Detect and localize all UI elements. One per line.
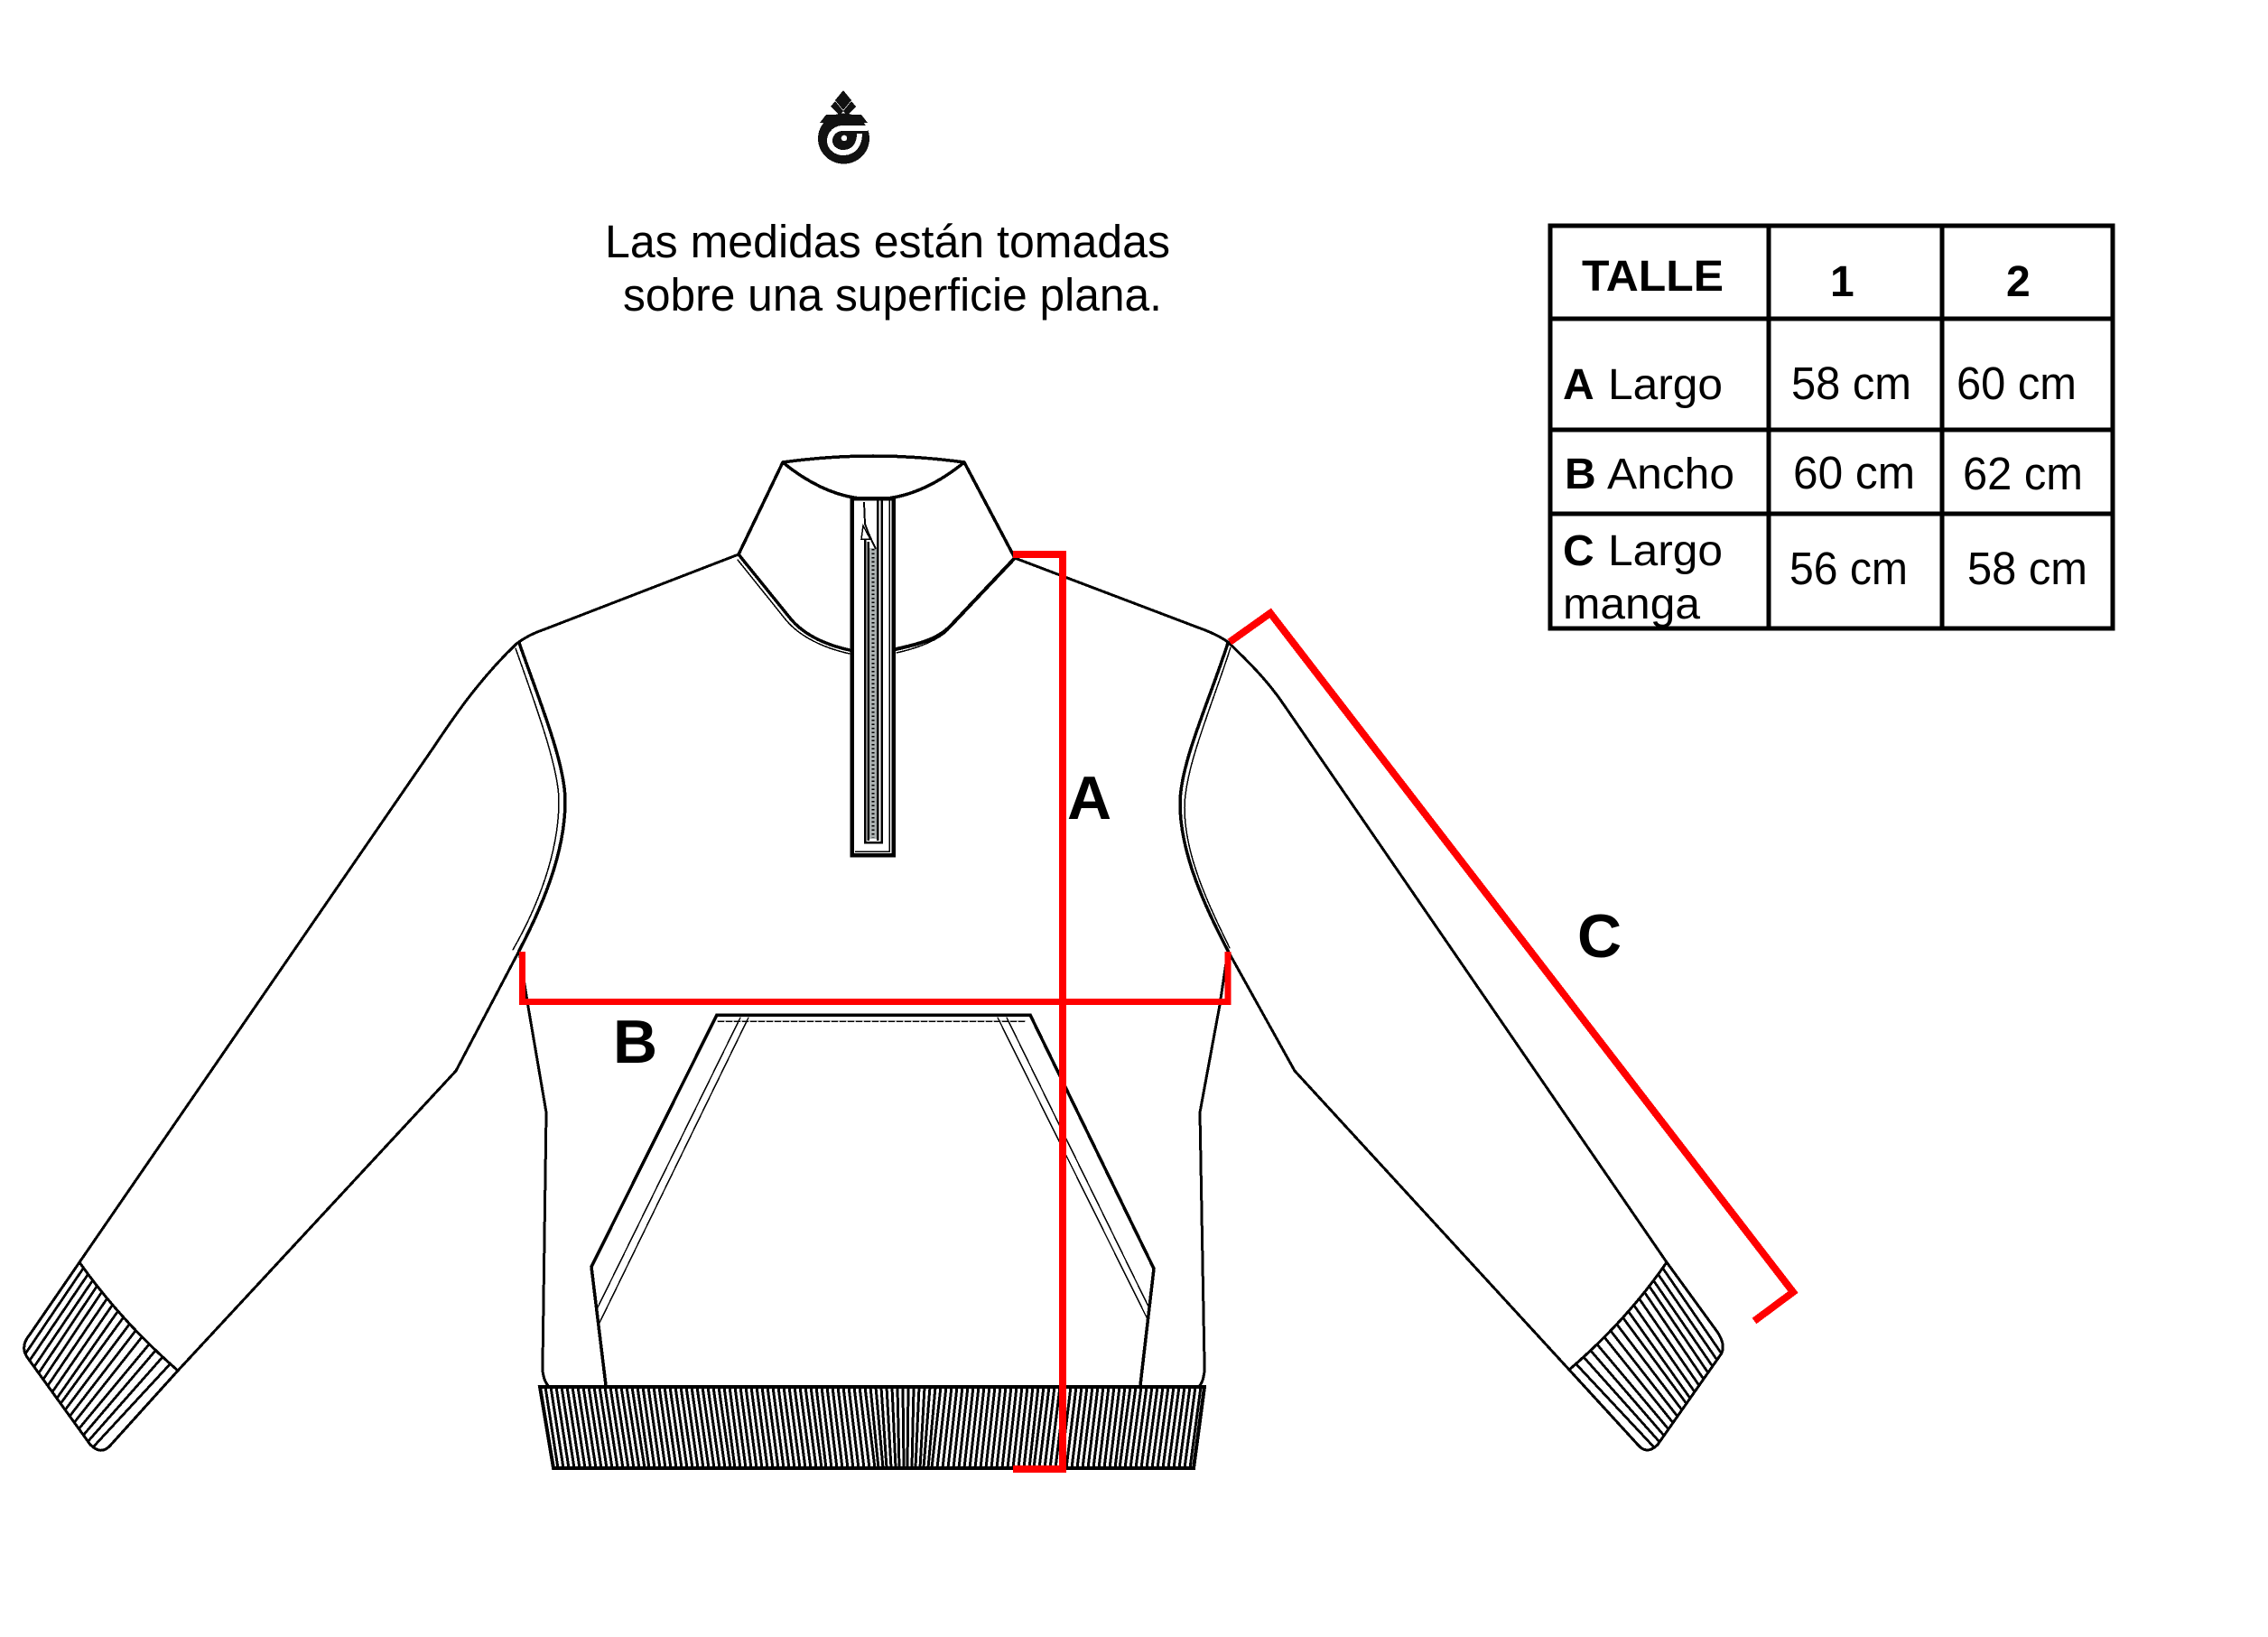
table header row [1582,253,2031,306]
row A Largo: Largo [1608,361,1723,409]
table grid [1550,226,2113,628]
collar [739,456,1015,558]
bottom ribbed hem [540,1387,1204,1468]
row C Largo manga: manga [1563,581,1700,628]
label C: C [1577,902,1622,971]
text block: measurement note [605,216,1170,321]
row C Largo manga: C [1563,527,1594,575]
table header row: TALLE [1582,253,1724,301]
row B Ancho: B [1565,451,1596,498]
row A Largo: 58 cm [1791,358,1911,409]
row C Largo manga: 58 cm [1967,543,2087,594]
table header row: 2 [2006,258,2031,306]
row C Largo manga: Largo [1608,527,1723,575]
right sleeve [1228,642,1667,1370]
row C Largo manga [1563,527,2087,628]
text block: measurement note: Las medidas están tomadas [605,216,1170,267]
garment: half-zip sweatshirt flat drawing [24,456,1723,1468]
body sides [519,951,1228,1387]
size table [1550,226,2113,628]
row B Ancho: 60 cm [1793,447,1915,498]
kangaroo pocket [591,1015,1154,1385]
measurement line A: body length [1013,554,1063,1469]
row A Largo: A [1563,361,1594,409]
measurement line B: chest width [522,952,1228,1002]
right cuff [1569,1262,1723,1450]
measurement line C: sleeve length [1230,613,1793,1321]
row A Largo: 60 cm [1957,358,2077,409]
row B Ancho: 62 cm [1963,448,2083,499]
shoulders and neck seam [516,554,1228,654]
label B: B [613,1008,657,1076]
icon: brand logo [818,90,869,164]
row B Ancho [1565,447,2083,499]
text block: measurement note: sobre una superficie plana. [623,269,1162,321]
table header row: 1 [1830,258,1854,306]
row C Largo manga: 56 cm [1789,543,1908,594]
zipper placket [852,498,894,855]
left cuff [24,1262,178,1450]
row A Largo [1563,358,2077,409]
left sleeve [79,644,519,1371]
armhole seams [513,643,1231,951]
row B Ancho: Ancho [1607,451,1734,498]
label A: A [1067,764,1111,832]
